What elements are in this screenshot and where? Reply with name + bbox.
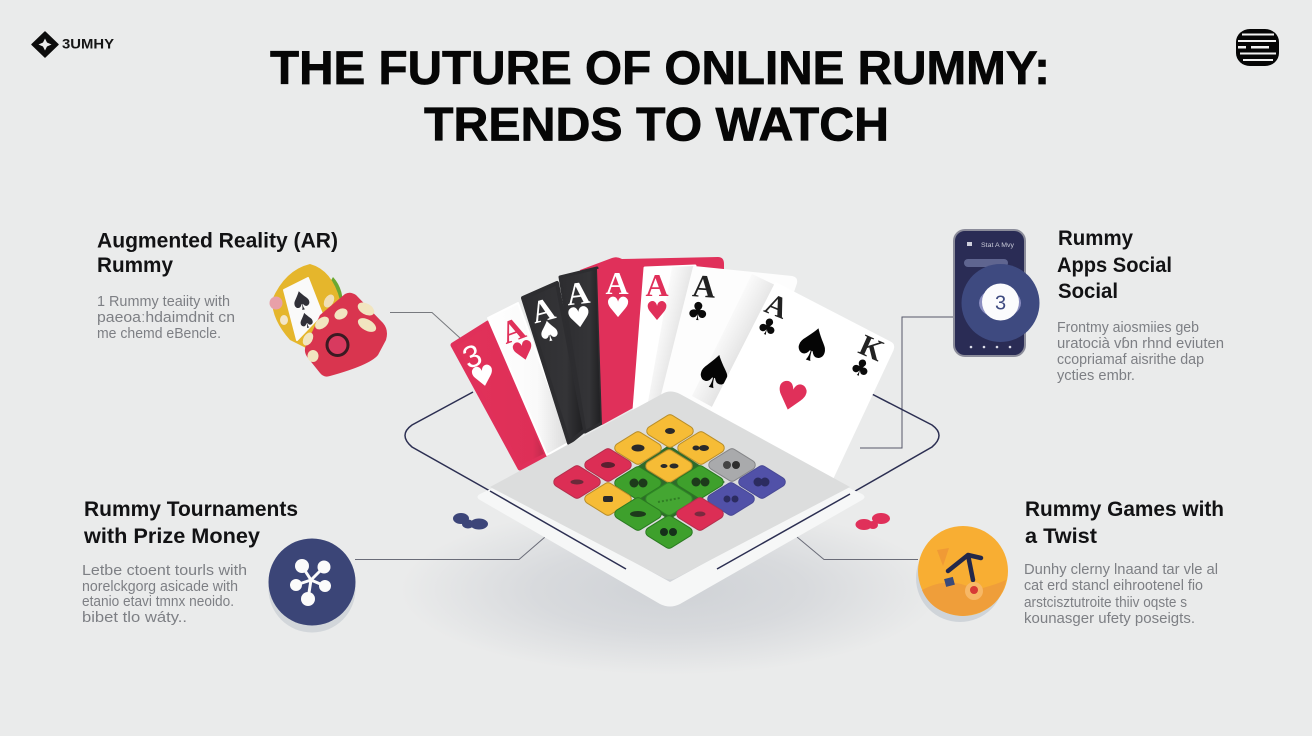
body text xyxy=(97,294,235,342)
card: white ace and king: A xyxy=(760,287,793,326)
card: red three of hearts: ♥ xyxy=(467,358,499,395)
heading: Rummy xyxy=(1058,226,1133,250)
card: white ace of hearts xyxy=(634,266,695,410)
icon: AR card and dice: ♠ xyxy=(294,307,318,335)
tile: green xyxy=(682,470,718,494)
logo: 3UMHY xyxy=(62,36,114,52)
title: THE FUTURE OF ONLINE RUMMY: xyxy=(270,41,1050,94)
tile: green xyxy=(650,520,688,544)
panel: rummy apps social xyxy=(954,226,1224,384)
icon: phone with number badge: 3 xyxy=(995,292,1006,314)
panel: rummy games with a twist xyxy=(916,497,1224,627)
connector lines and outline xyxy=(355,312,954,560)
game board xyxy=(478,392,864,606)
card: white ace of clubs: ♣ xyxy=(686,296,710,327)
title xyxy=(270,41,1050,150)
tile: grey xyxy=(714,454,750,476)
board shadow xyxy=(400,505,940,675)
heading: Rummy Tournaments xyxy=(84,497,298,521)
logo xyxy=(32,32,114,57)
icon: phone with number badge xyxy=(954,230,1040,356)
card: black ace of spades xyxy=(523,283,585,443)
icon: orange badge xyxy=(916,526,1008,622)
tile: green xyxy=(620,472,656,494)
body text xyxy=(1024,562,1218,627)
board: grey top xyxy=(490,392,850,580)
panel: rummy tournaments xyxy=(82,497,356,632)
body text: cat erd stancl eihrootenel fio xyxy=(1024,578,1203,594)
body text: me chemd eBencle. xyxy=(97,326,221,342)
tile: red xyxy=(558,470,596,494)
heading xyxy=(83,497,298,548)
card: white ace and king xyxy=(712,284,893,478)
card: black ace of hearts: ♥ xyxy=(565,300,594,335)
card: white ace and king: ♠ xyxy=(785,313,841,377)
body text: norelckgorg asicade with xyxy=(82,579,238,595)
menu icon xyxy=(1236,29,1279,66)
tile: blue xyxy=(712,488,750,510)
tile: green centre xyxy=(650,488,688,510)
card: white ace of clubs: ♠ xyxy=(688,341,742,403)
tile: red xyxy=(682,502,718,526)
heading: Rummy xyxy=(97,253,173,277)
heading xyxy=(1057,226,1172,303)
card: red ace of hearts: A xyxy=(605,265,629,301)
body text: Frontmy aiosmiies geb xyxy=(1057,320,1199,336)
tile: red xyxy=(590,454,626,476)
icon: navy club xyxy=(453,513,488,530)
body text: ccopriamaf aisrithe dap xyxy=(1057,352,1204,368)
body text: Dunhy clerny lnaand tar vle al xyxy=(1024,562,1218,578)
card: white ace of hearts: ♥ xyxy=(645,297,669,327)
tile: yellow xyxy=(620,436,656,460)
body text: arstcisztutroite thiiv oqste s xyxy=(1024,595,1187,611)
heading xyxy=(97,228,338,277)
body text: bibet tlo wáty.. xyxy=(82,610,187,626)
fan of playing cards xyxy=(453,257,893,478)
card: red three of hearts: 3 xyxy=(458,337,487,376)
card: white ace and king: K xyxy=(854,329,889,368)
card: white ace and king: ♣ xyxy=(753,312,781,344)
card: black ace of hearts: A xyxy=(564,274,592,312)
body text xyxy=(82,563,247,626)
body text: Letbe ctoent tourls with xyxy=(82,563,247,579)
heading: Apps Social xyxy=(1057,253,1172,277)
heading: with Prize Money xyxy=(83,524,260,548)
card: white ace of hearts: ♥ xyxy=(508,334,539,369)
icon: flower badge xyxy=(268,538,356,632)
title: TRENDS TO WATCH xyxy=(424,98,889,150)
body text xyxy=(1057,320,1224,384)
card: black ace of spades: ♠ xyxy=(533,313,565,350)
card: red three of hearts xyxy=(453,323,547,468)
card: white ace of hearts: A xyxy=(645,267,669,303)
card: white ace of clubs xyxy=(662,267,796,420)
card: white ace of hearts xyxy=(488,303,570,455)
card: white ace of clubs: A xyxy=(691,267,717,305)
icon: red club xyxy=(856,513,890,530)
card: red ace of hearts: ♥ xyxy=(605,291,631,324)
tile: yellow xyxy=(650,454,688,478)
heading xyxy=(1025,497,1224,548)
board: white base xyxy=(478,486,864,606)
icon: phone with number badge: Stat A Mvy xyxy=(981,242,1015,249)
body text: ycties embr. xyxy=(1057,368,1135,384)
card: white ace of hearts: A xyxy=(496,309,530,351)
tile: green xyxy=(620,502,656,526)
tile: yellow xyxy=(682,436,720,460)
heading: Rummy Games with xyxy=(1025,497,1224,521)
card: back red xyxy=(580,257,724,320)
heading: Augmented Reality (AR) xyxy=(97,228,338,252)
heading: a Twist xyxy=(1025,524,1097,548)
tile: yellow xyxy=(652,420,688,442)
body text: uratocià vɓn rhnd eviuten xyxy=(1057,336,1224,352)
icon: AR card and dice: ♠ xyxy=(286,284,317,319)
card: red ace of hearts xyxy=(597,264,645,425)
icon: AR card and dice xyxy=(270,264,387,377)
tile: yellow xyxy=(590,488,626,510)
panel: augmented reality xyxy=(97,228,387,377)
body text: etanio etavi tmnx neoido. xyxy=(82,594,234,610)
card: white ace and king: ♣ xyxy=(846,353,874,385)
tile grid backing xyxy=(615,445,725,520)
heading: Social xyxy=(1058,279,1118,303)
card: white ace and king: ♥ xyxy=(769,371,813,423)
card: black ace of spades: A xyxy=(527,290,559,330)
card: black ace of hearts xyxy=(560,268,602,432)
body text: paeoaːhdaimdnit cn xyxy=(97,310,235,326)
body text: 1 Rummy teaiity with xyxy=(97,294,230,310)
tile: blue xyxy=(744,470,780,494)
body text: kounasger ufety poseigts. xyxy=(1024,611,1195,627)
